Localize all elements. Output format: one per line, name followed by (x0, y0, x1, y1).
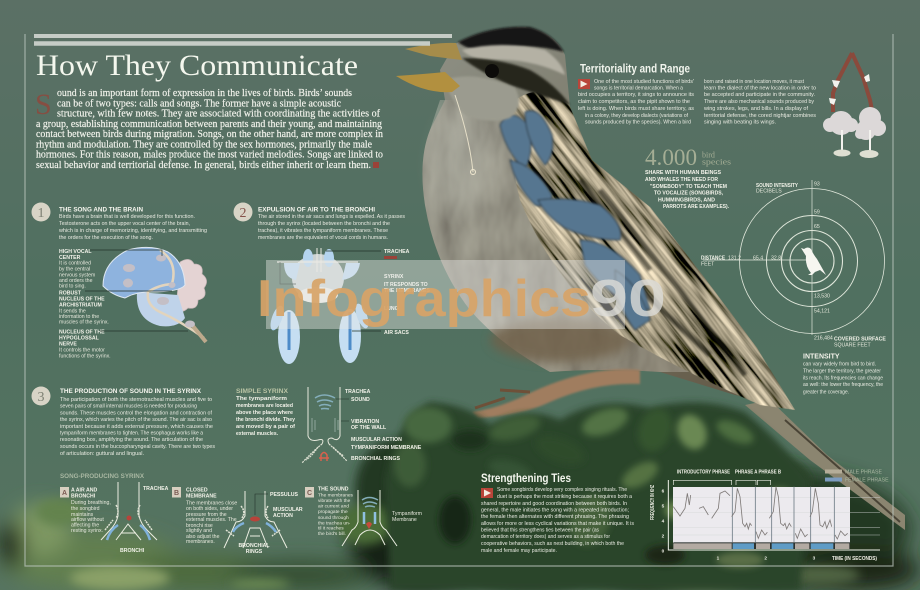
text column 2 (703, 79, 816, 126)
text column 2: be accepted and participate in the community. (704, 92, 815, 98)
chart labels: 216,484 (814, 336, 833, 342)
step C: Tympaniform (392, 511, 422, 517)
dark wing shadows (580, 180, 745, 375)
step C (305, 486, 422, 546)
bird photo (356, 0, 920, 548)
diagram labels: IT RESPONDS TO (384, 282, 428, 288)
phrase labels: INTRODUCTORY PHRASE (677, 470, 730, 476)
intro text block: sexual behavior and territorial defense. In general, birds either inherit or learn them. (36, 160, 371, 171)
text block: external muscles. (236, 431, 279, 437)
brain labels: It is controlled (59, 260, 91, 266)
step B: external muscles. The (186, 517, 237, 523)
air sacs diagram (268, 248, 381, 364)
text column 1: bird occupies a territory, it sings to announce its (578, 92, 694, 98)
text block: intensity: The larger the territory, the greater (803, 368, 881, 374)
stat: 4.000 bird species: AND WHALES THE NEED FOR (645, 177, 718, 183)
text column 2: learn the dialect of the new location in order to (704, 86, 816, 92)
text block: Testosterone acts on the upper vocal center of the brain, (59, 221, 190, 227)
text block: shared repertoire and good coordination between both birds. In (481, 501, 627, 507)
concentric sound range chart (701, 180, 886, 348)
diagram labels: LUNG (384, 306, 399, 312)
eye (485, 64, 499, 78)
heading: Strengthening Ties (481, 473, 571, 485)
diagram A (101, 482, 157, 540)
step A (60, 482, 169, 554)
step B: BRONCHIAL (238, 543, 270, 549)
text column 2: born and raised in one location moves, it must (704, 79, 804, 85)
step B (172, 487, 303, 555)
simple syrinx labels: VIBRATION (351, 419, 379, 425)
step C: air current and (318, 504, 349, 510)
text column 2: singing with beating its wings. (704, 120, 776, 126)
step C: Membrane (392, 517, 417, 523)
simple syrinx labels: OF THE WALL (351, 425, 387, 431)
text block: The participation of both the sternotracheal muscles and five to (60, 397, 212, 403)
simple syrinx labels (345, 389, 422, 462)
tail (745, 400, 905, 530)
step C: the bird's bill. (318, 531, 346, 537)
step B: pressure from the (186, 512, 227, 518)
stat: 4.000 bird species: PARROTS ARE EXAMPLES). (663, 204, 730, 210)
axis values: 5 (662, 503, 665, 508)
stat: 4.000 bird species: "SOMEBODY" TO TEACH THEM (650, 184, 727, 190)
text block: intensity: greater the coverage. (803, 390, 849, 396)
intro text block: can be of two types: calls and songs. The former have a simple acoustic (57, 98, 341, 110)
text block: trachea), it vibrates the tympaniform membranes. These (258, 228, 388, 234)
step C: The membranes (318, 492, 354, 498)
text block: intensity (803, 354, 883, 396)
panel: territoriality and range (578, 53, 886, 158)
text column 1: in a colony, they develop dialects (variations of (585, 113, 688, 119)
trees with territorial song chain (823, 53, 886, 158)
icon: red arrow (578, 79, 590, 89)
text block: Birds have a brain that is well developed for this function. (59, 214, 195, 220)
text block: intensity: as well: the lower the frequency, the (803, 382, 883, 388)
axis values: 3 (813, 556, 816, 561)
chart labels: FEET (701, 262, 715, 268)
text block: important because it adds external pressure, which causes the (60, 424, 213, 430)
step B: ACTION (273, 513, 293, 519)
text block: demarcation of territory does) and serves as a stimulus for (481, 534, 610, 540)
step B: The membranes close (186, 500, 237, 506)
brain labels: It controls the motor (59, 348, 105, 354)
heading: EXPULSION OF AIR TO THE BRONCHI (258, 208, 375, 214)
leg (472, 369, 640, 418)
plot area (673, 487, 850, 543)
step B: B (174, 490, 179, 497)
chart labels: SOUND INTENSITY (756, 183, 798, 189)
chart labels: 59 (814, 210, 820, 216)
chart labels: DECIBELS (756, 188, 782, 194)
text column 2: territorial defense, the cored nightjar combines (704, 113, 816, 119)
watermark (257, 260, 666, 329)
text block: general, the male initiates the song with a repeated introduction; (481, 508, 629, 514)
diagram C (342, 490, 397, 546)
step B: also adjust the (186, 534, 220, 540)
panel: the production of sound in the syrinx (32, 386, 215, 457)
foliage background (0, 440, 920, 590)
brain labels: and orders the (59, 278, 93, 284)
text block: sounds. These muscles control the elongation and contraction of (60, 410, 212, 416)
brain labels: It sends the (59, 308, 86, 314)
throat line (455, 95, 473, 172)
step B: slightly and (186, 528, 212, 534)
axis values: 2 (662, 533, 665, 538)
brain labels: information to the (59, 314, 99, 320)
chart labels: 93 (814, 182, 820, 188)
brain labels: ARCHISTRIATUM (59, 302, 102, 308)
brain labels: HIGH VOCAL (59, 249, 92, 255)
intro text block: rhythm and modulation. They are controlled by the sex hormones, primarily the male (36, 140, 372, 150)
text block: tympaniform membranes to tighten. The esophagus works like a (60, 430, 204, 436)
stat: 4.000 bird species: SHARE WITH HUMAN BEINGS (645, 170, 722, 176)
axis values: 6 (662, 488, 665, 493)
panel: song-producing syrinx (60, 474, 422, 555)
step C: THE SOUND (318, 486, 349, 492)
panel: simple syrinx (236, 387, 422, 463)
step A: BRONCHI (120, 548, 145, 554)
panel: strengthening ties (481, 473, 634, 554)
chart labels: 65 (814, 224, 820, 230)
brain labels: nervous system (59, 272, 95, 278)
icon: singing bird (801, 248, 826, 275)
chart labels: COVERED SURFACE (834, 336, 886, 342)
diagram labels: THE MEMBRANES (384, 288, 430, 294)
text block: Some songbirds develop very complex singing rituals. The (497, 487, 627, 493)
number badge 1: 1 (38, 206, 44, 221)
text block: the bronchi divide. They (236, 417, 295, 423)
text block: above the place where (236, 410, 293, 416)
text block (60, 397, 215, 457)
text block: believed that this strengthens ties between the pair (as (481, 528, 599, 534)
brain labels: NUCLEUS OF THE (59, 330, 105, 336)
brain labels: bird to sing. (59, 284, 86, 290)
text block (481, 487, 634, 554)
number badge 1 (32, 202, 50, 222)
brain diagram (85, 247, 207, 342)
text column 1: sounds produced by the species). When a bird (585, 120, 691, 126)
text column 1: songs is territorial demarcation. When a (594, 86, 684, 92)
step A: maintains (71, 512, 94, 518)
text block: of articulation: guttural and lingual. (60, 451, 144, 457)
axis values: 2 (764, 556, 767, 561)
stat: 4.000 bird species: 4.000 (645, 145, 697, 170)
text block: which is in charge of memorizing, identifying, and transmitting (58, 228, 207, 234)
y-axis title: FREQUENCY IN KHZ (650, 484, 656, 520)
number badge 2: 2 (240, 206, 246, 221)
title: How They Communicate (36, 49, 358, 82)
frequency line chart (650, 470, 880, 562)
icon: red arrow (481, 488, 493, 498)
chart labels: DISTANCE (701, 256, 725, 262)
simple syrinx diagram (302, 387, 349, 463)
diagram labels: AIR SACS (384, 330, 409, 336)
text block: membranes are located (236, 403, 293, 409)
frequency line chart: PHRASE A PHRASE B (735, 470, 781, 476)
lower beak (396, 72, 460, 92)
brain labels: HYPOGLOSSAL (59, 336, 100, 342)
text block: through the syrinx (located between the bronchi and the (258, 221, 390, 227)
chart labels (701, 182, 886, 348)
text block: cooperative behaviors, such as nest building, in which both the (481, 541, 624, 547)
legend: MALE PHRASE (845, 470, 882, 476)
chart labels: 54,121 (814, 308, 830, 314)
intro text block (35, 88, 384, 171)
text column 1: claim to competitors, as the pipit shown to the (578, 99, 690, 105)
diagram labels (384, 249, 430, 336)
step C: vibrate with the (318, 498, 351, 504)
step B: RINGS (246, 549, 263, 555)
brain labels: by the central (59, 266, 90, 272)
brain labels: CENTER (59, 255, 81, 261)
panel: expulsion of air to the bronchi (234, 202, 430, 364)
step B: bronchi rise (186, 523, 213, 529)
text block: duet is perhaps the most striking because it requires both a (497, 494, 633, 500)
step C: propagate the (318, 509, 348, 515)
step B: MEMBRANE (186, 494, 217, 500)
brain labels: NERVE (59, 342, 77, 348)
heading: SIMPLE SYRINX (236, 389, 288, 395)
step C: til it reaches (318, 526, 344, 532)
intro text block: hormones. For this reason, males produce the most varied melodies. Songs are linked to (36, 150, 383, 160)
text block: the female then alternates with different phrasing. The phrasing (481, 514, 629, 520)
number badge 3 (32, 386, 50, 406)
chart labels: 13,530 (814, 294, 830, 300)
legend (825, 470, 889, 484)
heading: SONG-PRODUCING SYRINX (60, 474, 144, 480)
text column 2: wing strokes, legs, and bills. In a display of (703, 106, 808, 112)
diagram B (224, 491, 287, 548)
text block (236, 396, 295, 437)
breast texture (422, 100, 700, 372)
diagram labels: TRACHEA (384, 249, 410, 255)
step B: MUSCULAR (273, 507, 303, 513)
text column 1: One of the most studied functions of birds' (594, 79, 694, 85)
step A: resting syrinx. (71, 528, 103, 534)
text block: allows for more or less cyclical variations that make it unique. It is (481, 521, 634, 527)
watermark: 90 (590, 270, 666, 328)
simple syrinx labels: MUSCULAR ACTION (351, 437, 402, 443)
step A: affecting the (71, 522, 99, 528)
upper beak (405, 43, 462, 60)
text block: male and female may participate. (481, 548, 557, 554)
heading: THE PRODUCTION OF SOUND IN THE SYRINX (60, 389, 201, 395)
step C: the trachea un- (318, 520, 351, 526)
step B: on both sides, under (186, 506, 233, 512)
text block (258, 214, 405, 241)
text block (58, 214, 207, 241)
blue wing feathers (500, 111, 650, 330)
step A: During breathing, (71, 500, 111, 506)
stat: 4.000 bird species: species (702, 158, 731, 166)
simple syrinx labels: TYMPANIFORM MEMBRANE (351, 445, 422, 451)
axis values: 4 (662, 518, 665, 523)
intro text block: a group, establishing communication between parents and their young, and maintaining (36, 119, 383, 130)
watermark: Infographics (257, 270, 591, 328)
intro text block: ound is an important form of expression in the lives of birds. Birds’ sounds (57, 88, 352, 99)
chart labels: 65.4 (753, 256, 763, 262)
axis values: 0 (662, 548, 665, 553)
brain labels: muscles of the syrinx. (59, 320, 109, 326)
simple syrinx labels: BRONCHIAL RINGS (351, 456, 400, 462)
heading: Territoriality and Range (580, 64, 690, 76)
text block: resonating box, amplifying the sound. The articulation of the (60, 437, 203, 443)
brain labels: functions of the syrinx. (59, 354, 111, 360)
text block: intensity: INTENSITY (803, 354, 840, 360)
body (422, 27, 790, 405)
chart labels: SQUARE FEET (834, 342, 871, 348)
text block: intensity: can vary widely from bird to bird. (803, 362, 876, 368)
text column 1: left is doing. When birds must share territory, as (578, 106, 694, 112)
step A: A AIR AND (71, 488, 97, 494)
foliage in front of the bird (385, 402, 810, 590)
diagram labels: SYRINX (384, 274, 404, 280)
intro text block: contact between birds during migration. Songs, on the other hand, are more complex in (36, 129, 384, 140)
text block: the syrinx, which varies the pitch of the sound. The air sac is also (60, 417, 212, 423)
brain labels (59, 249, 111, 360)
simple syrinx labels: SOUND (351, 397, 370, 403)
text block: seven pairs of small internal muscles is needed for producing (60, 404, 197, 410)
legend: FEMALE PHRASE (845, 478, 889, 484)
stat: 4.000 bird species: bird (702, 150, 715, 160)
brain labels: ROBUST (59, 290, 82, 296)
text block: are moved by a pair of (236, 424, 295, 430)
stat: 4.000 bird species: TO VOCALIZE (SONGBIRDS, (654, 190, 724, 196)
step A: BRONCHI (71, 494, 96, 500)
step A: airflow without (71, 517, 104, 523)
step C: sound through (318, 515, 349, 521)
text block: intensity: its reach. Its frequencies can change (803, 376, 883, 382)
crown and head (458, 27, 564, 52)
step B: membranes. (186, 539, 215, 545)
panel: the song and the brain (32, 202, 207, 360)
step B: CLOSED (186, 488, 208, 494)
x-axis title: TIME (IN SECONDS) (832, 556, 877, 562)
text block: membranes are the equivalent of vocal cords in humans. (258, 235, 388, 241)
male and female song traces (673, 487, 848, 539)
simple syrinx labels: TRACHEA (345, 389, 371, 395)
step B: PESSULUS (270, 492, 299, 498)
axis values: 1 (717, 556, 720, 561)
step C: C (307, 490, 312, 497)
step A: A (62, 490, 67, 497)
number badge 2 (234, 202, 252, 222)
brain labels: NUCLEUS OF THE (59, 296, 105, 302)
chart labels: 32.8 (771, 256, 781, 262)
chart labels: 131.2 (728, 256, 741, 262)
heading: THE SONG AND THE BRAIN (59, 208, 143, 214)
number badge 3: 3 (38, 390, 44, 405)
text block: The air stored in the air sacs and lungs is expelled. As it passes (258, 214, 405, 220)
axis values (662, 488, 816, 561)
text block: The tympaniform (236, 396, 287, 402)
drop cap: S (35, 88, 52, 121)
text column 2: There are also mechanical sounds produced by (704, 99, 814, 105)
text block: the orders for the execution of the song. (59, 235, 153, 241)
text block: sounds occurs in the buccopharyngeal cavity. There are two types (60, 444, 215, 450)
step A: the songbird (71, 506, 100, 512)
wing and back (356, 0, 920, 548)
intro text block: structure, with few notes. They are associated with coordinating the activities of (57, 108, 380, 120)
step A: TRACHEA (143, 486, 169, 492)
text column 1 (578, 79, 694, 126)
stat: 4.000 bird species (645, 145, 731, 210)
stat: 4.000 bird species: HUMMINGBIRDS, AND (658, 198, 715, 204)
